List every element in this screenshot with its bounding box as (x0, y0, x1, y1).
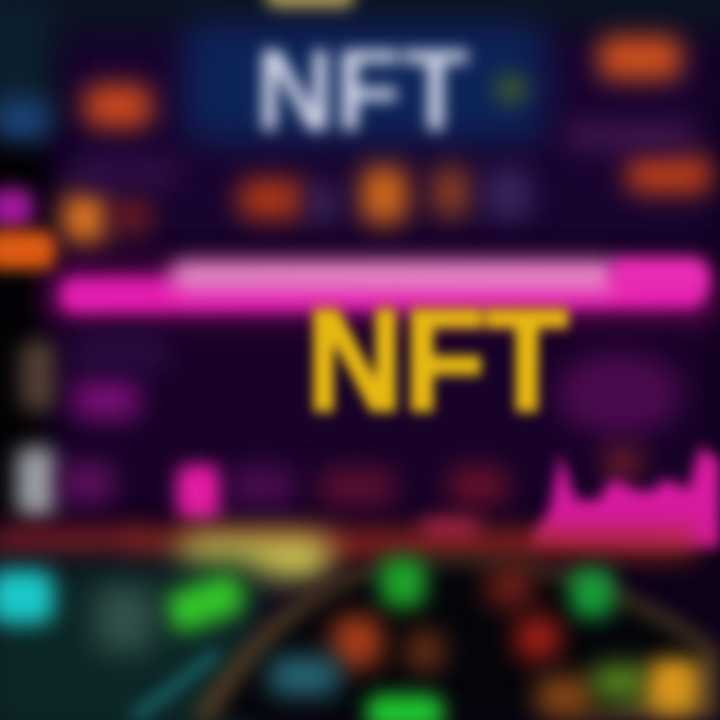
panel: dark car dome (187, 548, 720, 720)
heading: white NFT sign: NFT (255, 25, 469, 155)
icon: green dot beside sign (494, 74, 528, 104)
group: upper orange lights (0, 16, 720, 260)
chart: magenta bar silhouette (524, 439, 720, 559)
panel: glowing horizon strip (0, 502, 713, 602)
panel: blue NFT banner (185, 22, 545, 142)
group: left column lights (0, 174, 70, 528)
group: foreground colored lights (0, 542, 714, 720)
panel: dark foreground left (0, 562, 260, 720)
group: lower magenta lights (44, 333, 692, 531)
heading: yellow NFT sign: NFT (306, 279, 568, 441)
icon: gold light at top edge (265, 0, 355, 10)
panel: magenta neon bar (29, 241, 720, 338)
